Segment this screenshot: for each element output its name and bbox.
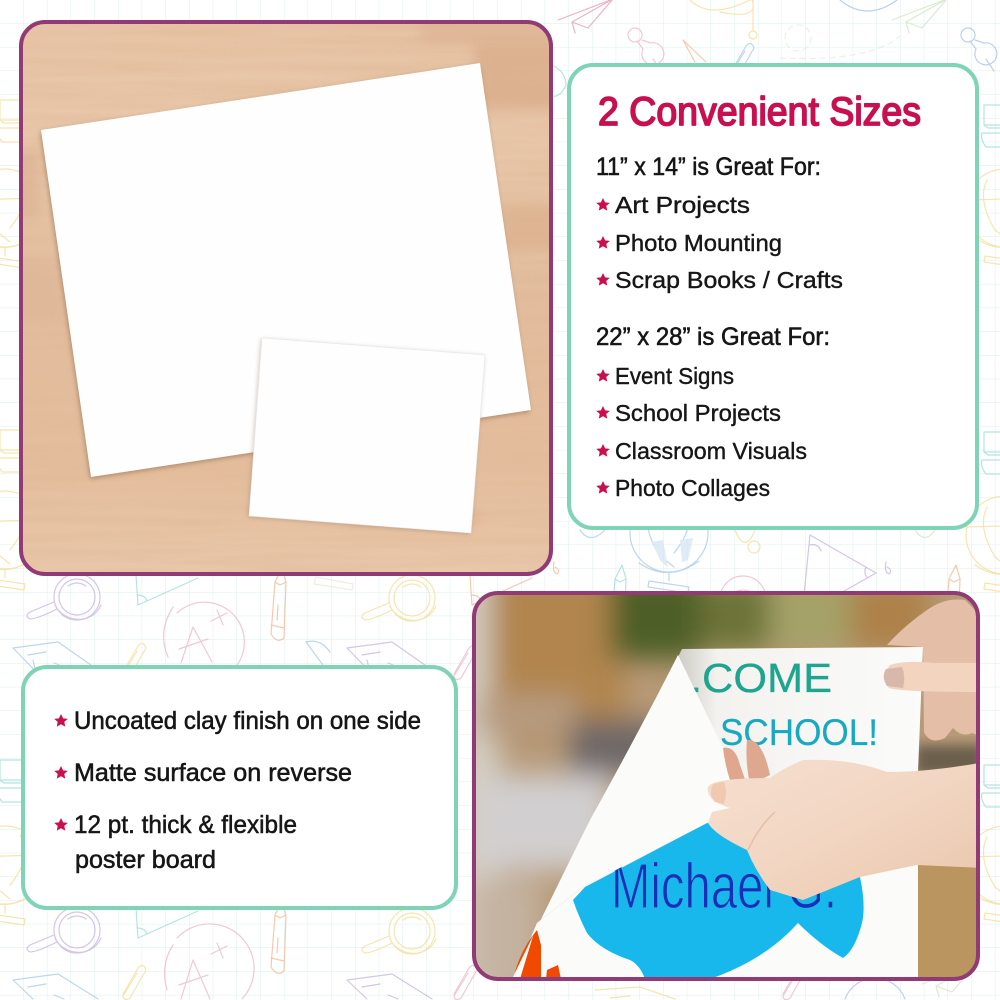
heading: 2 Convenient Sizes: 2 Convenient Sizes [598, 90, 921, 134]
lower poster sheet [530, 822, 918, 977]
folded poster flap [512, 655, 740, 979]
blurred room background [476, 595, 942, 977]
large white poster board 22 x 28 [40, 63, 531, 479]
list: 22 x 28 uses [596, 363, 807, 501]
list: 11 x 14 uses: Photo Mounting [615, 230, 782, 256]
list: 22 x 28 uses: Photo Collages [615, 475, 770, 501]
upper hand holding corner [884, 599, 985, 740]
blue cut-out shape [573, 823, 864, 979]
feature: 12 pt thick and flexible [54, 811, 297, 874]
poster text: Michael G.: Michael G. [611, 850, 837, 922]
lower hand pinching poster [708, 740, 985, 900]
orange cut-out shape [513, 930, 561, 979]
feature: 12 pt thick and flexible: poster board [75, 846, 216, 874]
panel: photo of two white poster boards on wood [10, 10, 570, 574]
list: 11 x 14 uses [596, 192, 843, 293]
poster text: COME: .COME [690, 655, 832, 701]
subheading: 22 x 28 uses: 22” x 28” is Great For: [596, 323, 830, 351]
panel: photo of hands lifting a poster [472, 591, 980, 981]
panel: material features [23, 667, 456, 908]
list: 11 x 14 uses: Art Projects [615, 192, 750, 218]
feature: matte surface: Matte surface on reverse [74, 759, 352, 787]
curled upper part of poster [678, 647, 923, 790]
poster text: SCHOOL!: SCHOOL! [720, 712, 878, 753]
subheading: 11 x 14 uses: 11” x 14” is Great For: [596, 153, 821, 181]
list: 11 x 14 uses: Scrap Books / Crafts [615, 267, 843, 293]
feature: uncoated clay finish: Uncoated clay finish on one side [74, 707, 421, 735]
feature: 12 pt thick and flexible: 12 pt. thick & flexible [74, 811, 297, 839]
list: 22 x 28 uses: Event Signs [615, 363, 734, 389]
panel: 2 convenient sizes list [569, 65, 977, 528]
list: 22 x 28 uses: Classroom Visuals [615, 438, 807, 464]
small white poster board 11 x 14 [248, 338, 485, 534]
list: 22 x 28 uses: School Projects [615, 400, 781, 426]
